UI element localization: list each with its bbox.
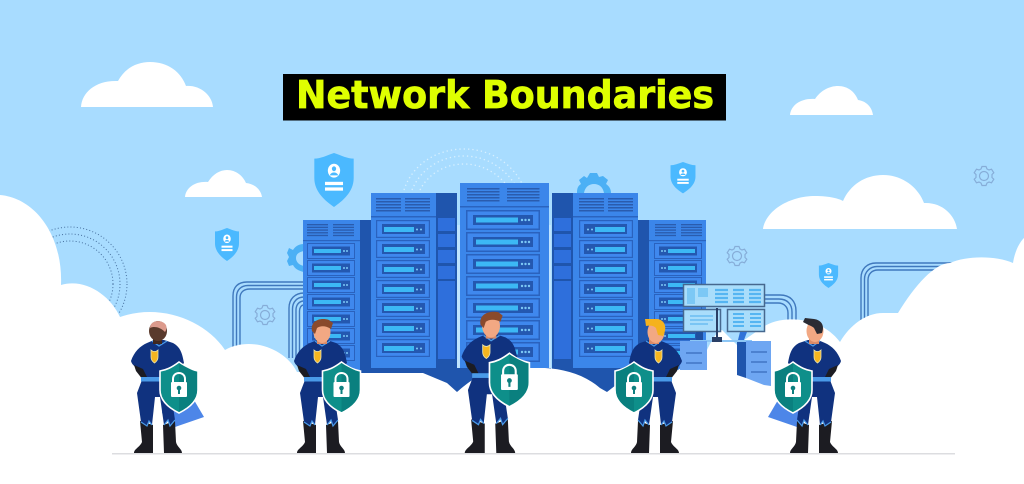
icon: gear centre right — [727, 246, 747, 266]
cloud: top left — [81, 62, 213, 107]
ground line — [112, 453, 955, 454]
head — [312, 319, 333, 344]
icon: blue gear behind right server — [577, 173, 611, 193]
person 1 with cape and shield — [131, 321, 204, 453]
monitors and desk — [680, 284, 771, 386]
monitor: lower right — [728, 310, 764, 340]
head — [149, 321, 167, 344]
figure — [294, 340, 347, 453]
cape — [162, 353, 204, 427]
icon: shield far right — [819, 263, 838, 288]
server: left — [371, 193, 457, 395]
cloud: large right — [763, 175, 957, 229]
teal shield — [774, 362, 812, 413]
cloud: top right — [790, 86, 873, 115]
person 2 with shield — [294, 319, 360, 453]
person 5 with cape and shield — [768, 318, 841, 453]
dotted arcs: above servers — [404, 149, 525, 190]
servers — [303, 183, 706, 396]
cloud: small centre left — [185, 170, 262, 197]
desk top — [690, 340, 752, 342]
figure — [629, 340, 682, 453]
cape — [768, 353, 810, 427]
pipes: right outer — [861, 263, 955, 320]
figure — [462, 334, 517, 453]
teal shield — [489, 353, 529, 407]
figure — [788, 340, 841, 453]
drawers: right — [737, 341, 771, 386]
figure — [131, 340, 184, 453]
monitor: top wide — [684, 284, 764, 306]
icon: blue gear left of servers — [287, 244, 304, 272]
icon: gear top right — [974, 166, 994, 186]
head — [803, 318, 824, 344]
monitor stand — [712, 308, 722, 342]
icon: shield right — [671, 162, 695, 193]
head — [645, 319, 665, 344]
person 3 with shield — [462, 312, 529, 453]
server: centre — [457, 183, 551, 396]
server: far right — [638, 220, 706, 385]
teal shield — [160, 362, 198, 413]
server: far left — [303, 220, 371, 385]
drawers: left — [680, 341, 707, 370]
icon: gear lower left — [255, 306, 275, 324]
person 4 with shield — [615, 319, 682, 453]
pipes: left outer — [233, 282, 305, 347]
pipes: monitors to right — [765, 295, 796, 320]
head — [480, 312, 503, 339]
monitor: lower left — [684, 310, 720, 340]
dotted arcs: left — [13, 227, 127, 341]
icon: shield large left — [314, 153, 354, 207]
pipes: left inner — [289, 293, 304, 358]
server: right — [552, 193, 638, 395]
teal shield — [615, 362, 653, 413]
title: Network Boundaries — [296, 73, 714, 117]
teal shield — [322, 362, 360, 413]
white foreground cloud bank — [0, 195, 1024, 484]
icon: shield left — [215, 228, 239, 261]
